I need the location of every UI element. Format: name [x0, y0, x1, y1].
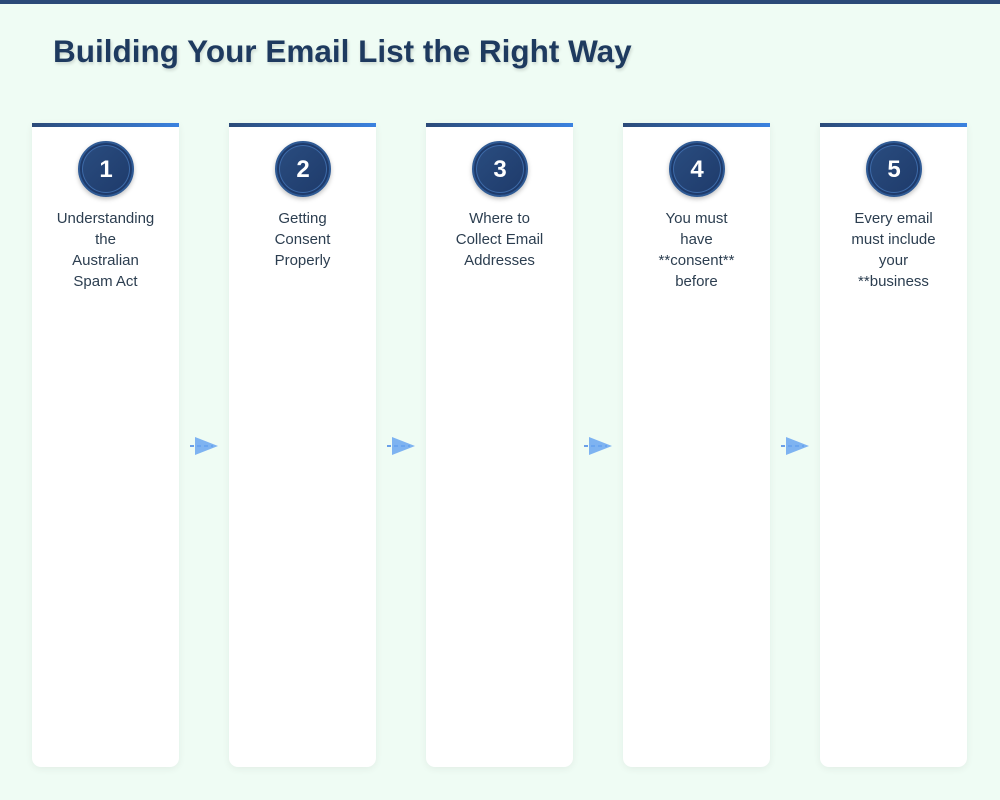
panel: step 4: **consent**: [659, 252, 734, 269]
panel: step 1: the: [95, 231, 116, 248]
arrow 1: [190, 437, 218, 455]
panel: step 5: [820, 123, 967, 767]
panel: step 4: You must: [666, 210, 728, 227]
panel: step 5: must include: [851, 231, 936, 248]
panel: step 1: 1: [99, 156, 113, 183]
panel: step 4: before: [675, 273, 718, 290]
panel: step 4: have: [680, 231, 713, 248]
arrow 2: [387, 437, 415, 455]
panel: step 2: Properly: [275, 252, 330, 269]
panel: step 3: 3: [493, 156, 507, 183]
panel: step 3: Collect Email: [456, 231, 543, 248]
arrow 4: [781, 437, 809, 455]
panel: step 3: [426, 123, 573, 767]
panel: step 2: Getting: [278, 210, 327, 227]
panel: step 5: your: [879, 252, 908, 269]
panel: step 1: Understanding: [57, 210, 154, 227]
panel: step 5: 5: [887, 156, 901, 183]
panel: step 2: [229, 123, 376, 767]
panel: step 4: 4: [690, 156, 704, 183]
panel: step 5: **business: [858, 273, 929, 290]
arrow 3: [584, 437, 612, 455]
panel: step 1: Australian: [72, 252, 139, 269]
panel: step 4: [623, 123, 770, 767]
panel: step 5: Every email: [854, 210, 933, 227]
panel: step 1: [32, 123, 179, 767]
title: Building Your Email List the Right Way: [53, 33, 632, 69]
panel: step 3: Addresses: [464, 252, 535, 269]
panel: step 3: Where to: [469, 210, 530, 227]
panel: step 2: 2: [296, 156, 310, 183]
panel: step 1: Spam Act: [73, 273, 138, 290]
panel: step 2: Consent: [275, 231, 330, 248]
